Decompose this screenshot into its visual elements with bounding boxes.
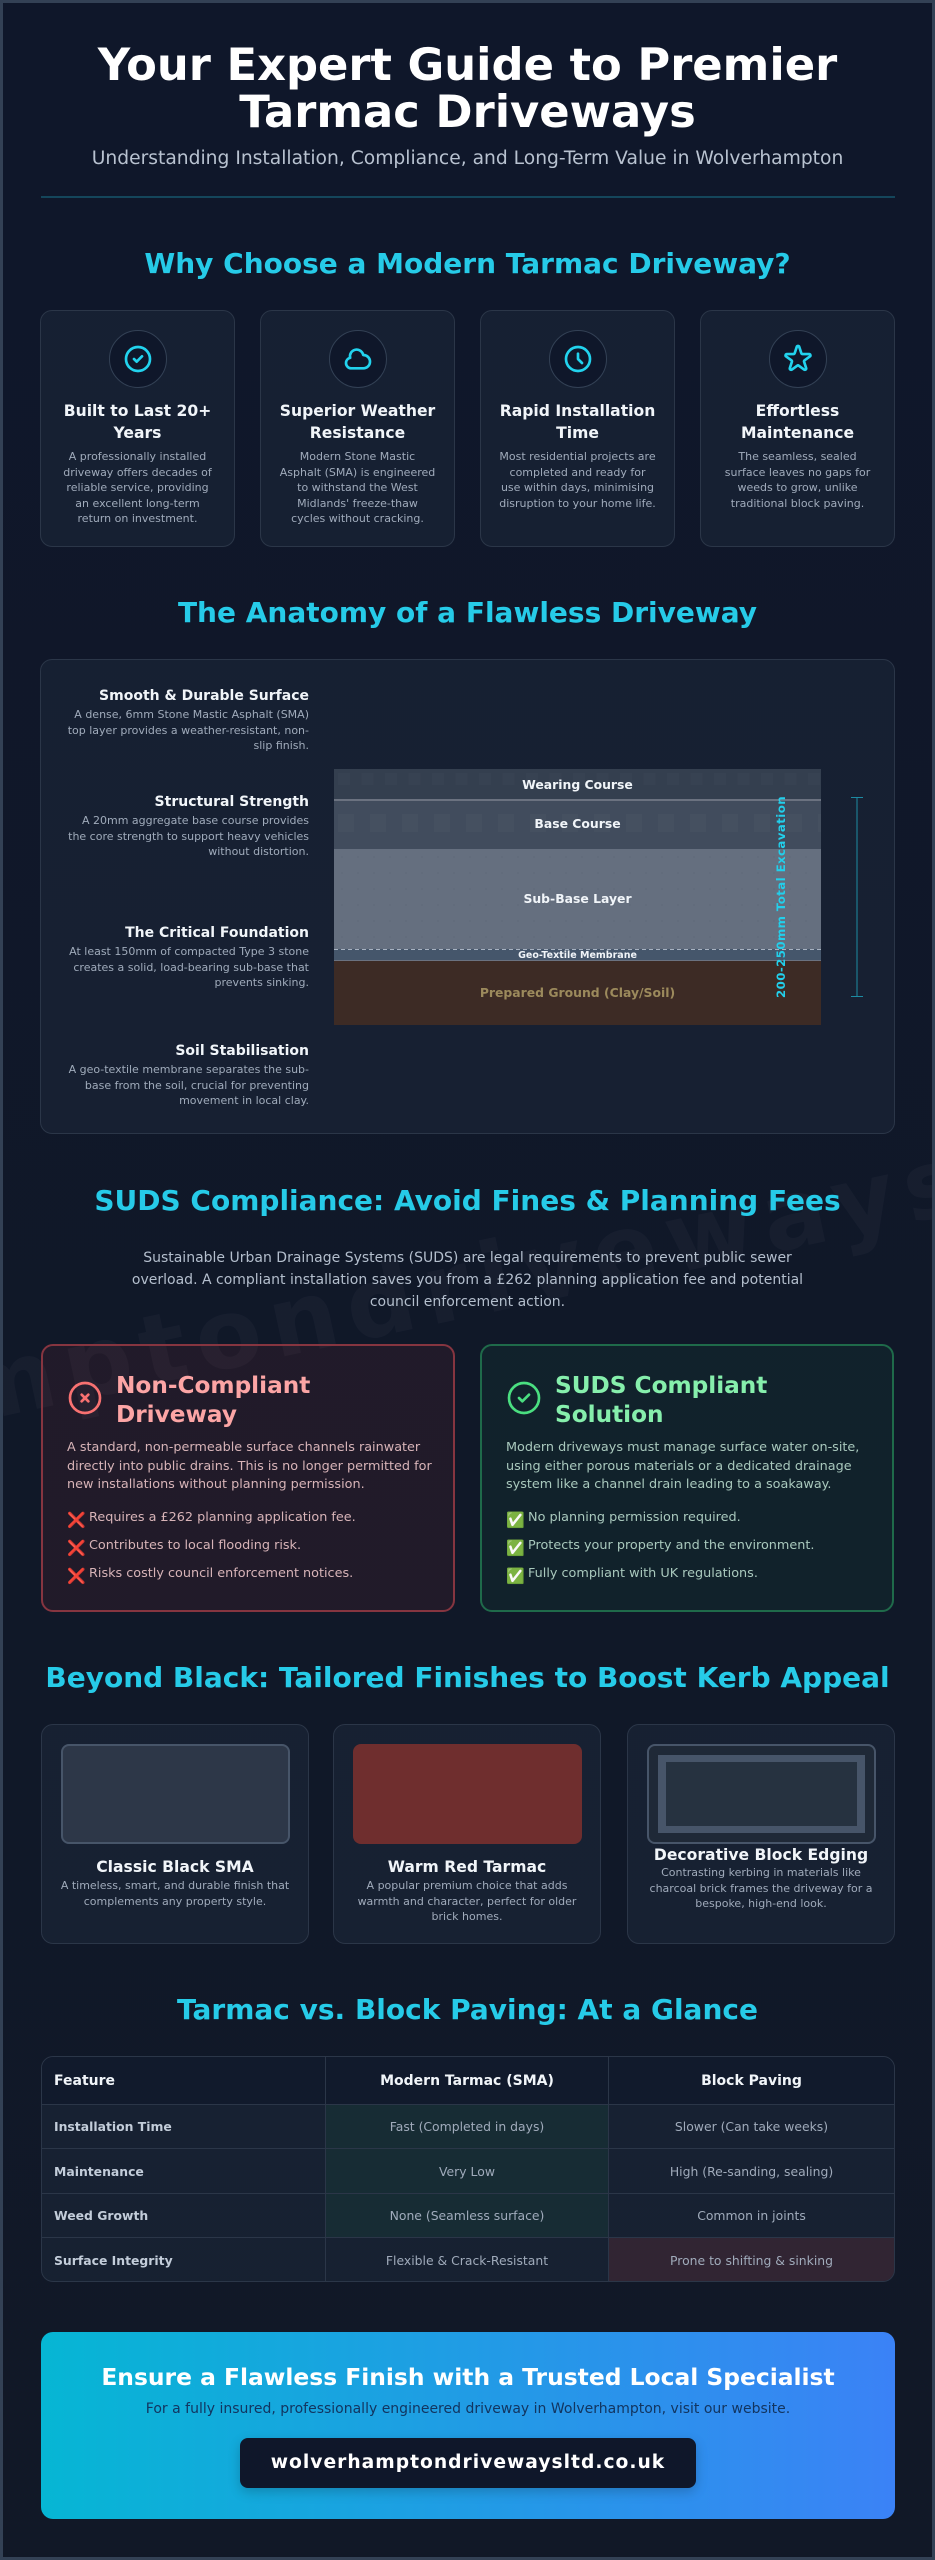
label text — [68, 708, 309, 752]
card text: reliable service, providing — [66, 481, 209, 494]
card text: to withstand the West — [297, 481, 418, 494]
finish text — [358, 1879, 576, 1923]
card text: traditional block paving. — [731, 497, 864, 510]
title — [97, 38, 838, 138]
card title: Resistance — [310, 424, 405, 442]
label text: creates a solid, load-bearing sub-base that — [73, 961, 309, 974]
card title: Time — [556, 424, 599, 442]
card text: completed and ready for — [510, 466, 645, 479]
card text: cycles without cracking. — [291, 512, 424, 525]
swatch: red — [353, 1744, 582, 1844]
finish text: A popular premium choice that adds — [367, 1879, 567, 1892]
finish text: complements any property style. — [84, 1895, 266, 1908]
panel title: Non-Compliant — [116, 1372, 310, 1399]
finish title: Classic Black SMA — [96, 1858, 254, 1876]
finish text: warmth and character, perfect for older — [358, 1895, 576, 1908]
label text: A 20mm aggregate base course provides — [82, 814, 309, 827]
list item: ❌ — [67, 1567, 86, 1585]
icon: star — [769, 330, 827, 388]
edging frame — [658, 1755, 865, 1833]
panel: warm red — [333, 1724, 601, 1944]
panel text: system like a channel drain leading to a soakaway. — [506, 1477, 831, 1492]
finish text: A timeless, smart, and durable finish that — [61, 1879, 289, 1892]
panel: weather resistance — [260, 310, 455, 547]
label text: At least 150mm of compacted Type 3 stone — [69, 945, 309, 958]
list item: Requires a £262 planning application fee. — [89, 1510, 356, 1525]
depth bracket — [851, 797, 863, 997]
text block: surface — [68, 688, 309, 752]
icon: check circle — [508, 1382, 540, 1414]
label text: slip finish. — [254, 739, 309, 752]
card title — [64, 402, 211, 442]
label text: A dense, 6mm Stone Mastic Asphalt (SMA) — [74, 708, 309, 721]
panel text: directly into public drains. This is no longer permitted for — [67, 1459, 432, 1474]
panel: call to action — [41, 2332, 895, 2519]
layer: sub-base — [334, 849, 821, 949]
text block: suds intro: overload. A compliant installation saves you from a £262 planning application fee and potential — [132, 1272, 803, 1288]
panel: rapid installation — [480, 310, 675, 547]
list item: Contributes to local flooding risk. — [89, 1538, 301, 1553]
label text: without distortion. — [208, 845, 309, 858]
card text: Midlands' freeze-thaw — [297, 497, 418, 510]
card text: return on investment. — [78, 512, 197, 525]
label text: prevents sinking. — [215, 976, 309, 989]
title: Tarmac Driveways — [239, 85, 696, 138]
panel: anatomy — [40, 659, 895, 1134]
finish title: Decorative Block Edging — [654, 1846, 868, 1864]
header: block paving: Block Paving — [701, 2072, 802, 2088]
row label: Maintenance — [54, 2164, 144, 2178]
card text: Asphalt (SMA) is engineered — [280, 466, 435, 479]
block value: Slower (Can take weeks) — [675, 2119, 828, 2134]
panel: block edging — [627, 1724, 895, 1944]
cta button — [240, 2438, 696, 2488]
layer: wearing course — [334, 769, 821, 799]
row: installation time — [54, 2119, 828, 2134]
label text: top layer provides a weather-resistant, non- — [68, 724, 309, 737]
card text: The seamless, sealed — [738, 450, 857, 463]
card title — [280, 402, 436, 442]
list — [506, 1510, 814, 1585]
list item: Risks costly council enforcement notices. — [89, 1566, 353, 1581]
text block: soil — [68, 1043, 309, 1107]
label text — [68, 814, 309, 858]
label text: movement in local clay. — [179, 1094, 309, 1107]
panel: non-compliant — [41, 1344, 455, 1612]
cta text: For a fully insured, professionally engineered driveway in Wolverhampton, visit our website. — [146, 2401, 790, 2417]
card text — [499, 450, 656, 510]
swatch: block edging — [647, 1744, 876, 1844]
list item: ✅ — [506, 1539, 525, 1557]
label text: the core strength to support heavy vehicles — [68, 830, 309, 843]
icon: cross circle — [68, 1382, 102, 1414]
label: base course: Base Course — [534, 816, 621, 831]
heading: comparison: Tarmac vs. Block Paving: At a Glance — [177, 1993, 758, 2026]
text block: suds intro — [132, 1250, 803, 1310]
finish title: Warm Red Tarmac — [388, 1858, 546, 1876]
list — [67, 1510, 356, 1585]
panel text — [67, 1440, 432, 1492]
swatch: black — [61, 1744, 290, 1844]
list item: ❌ — [67, 1539, 86, 1557]
list item: ✅ — [506, 1567, 525, 1585]
list item: ✅ — [506, 1511, 525, 1529]
label title: Soil Stabilisation — [175, 1043, 309, 1059]
block value: Prone to shifting & sinking — [670, 2252, 833, 2268]
text block: suds intro: Sustainable Urban Drainage Systems (SUDS) are legal requirements to prevent public sewer — [143, 1250, 792, 1266]
card text: an excellent long-term — [75, 497, 200, 510]
panel title: Solution — [555, 1401, 664, 1428]
text block: foundation — [69, 925, 309, 989]
panel: effortless maintenance — [700, 310, 895, 547]
label title: The Critical Foundation — [125, 925, 309, 941]
finish text — [61, 1879, 289, 1908]
card text: disruption to your home life. — [499, 497, 656, 510]
card text: weeds to grow, unlike — [737, 481, 858, 494]
card title: Built to Last 20+ — [64, 402, 211, 420]
comparison table — [41, 2056, 895, 2282]
card text: use within days, minimising — [501, 481, 654, 494]
card text: Most residential projects are — [499, 450, 656, 463]
tarmac value: Very Low — [439, 2164, 495, 2178]
header: feature: Feature — [54, 2072, 115, 2088]
finish text: brick homes. — [432, 1910, 502, 1923]
card title: Superior Weather — [280, 402, 435, 420]
card text — [63, 450, 212, 525]
label: prepared ground: Prepared Ground (Clay/Soil) — [480, 985, 675, 1000]
card title — [741, 402, 854, 442]
card text: A professionally installed — [69, 450, 206, 463]
cta button: wolverhamptondrivewaysltd.co.uk — [271, 2452, 665, 2473]
card text: Modern Stone Mastic — [300, 450, 415, 463]
panel: compliant — [480, 1344, 894, 1612]
finish text: Contrasting kerbing in materials like — [661, 1866, 861, 1879]
row: surface integrity — [42, 2238, 894, 2282]
row: maintenance — [54, 2164, 833, 2178]
tarmac value: None (Seamless surface) — [390, 2208, 544, 2223]
icon: cloud — [329, 330, 387, 388]
label text: base from the soil, crucial for preventing — [85, 1079, 309, 1092]
layer: prepared ground — [334, 961, 821, 1025]
list item: Protects your property and the environment. — [528, 1538, 814, 1553]
panel text: Modern driveways must manage surface water on-site, — [506, 1440, 859, 1455]
heading: suds: SUDS Compliance: Avoid Fines & Planning Fees — [94, 1184, 841, 1217]
label: wearing course: Wearing Course — [522, 777, 633, 792]
row label: Weed Growth — [54, 2208, 148, 2223]
card text — [725, 450, 870, 510]
tarmac value: Flexible & Crack-Resistant — [386, 2252, 548, 2268]
heading: why choose: Why Choose a Modern Tarmac Driveway? — [144, 247, 791, 280]
text block: strength — [68, 794, 309, 858]
card title: Rapid Installation — [500, 402, 655, 420]
diagram: driveway layers — [334, 769, 821, 1025]
label: sub-base: Sub-Base Layer — [523, 891, 632, 906]
list item: No planning permission required. — [528, 1510, 741, 1525]
panel text: using either porous materials or a dedicated drainage — [506, 1459, 852, 1474]
label: geo-textile: Geo-Textile Membrane — [518, 950, 637, 961]
text block: suds intro: council enforcement action. — [370, 1294, 565, 1310]
block value: Common in joints — [697, 2208, 806, 2223]
icon: clock — [549, 330, 607, 388]
heading: anatomy: The Anatomy of a Flawless Driveway — [178, 596, 757, 629]
panel title: SUDS Compliant — [555, 1372, 767, 1399]
list item: Fully compliant with UK regulations. — [528, 1566, 758, 1581]
layer: geo-textile — [334, 949, 821, 961]
cta heading: Ensure a Flawless Finish with a Trusted Local Specialist — [101, 2363, 835, 2391]
header: tarmac: Modern Tarmac (SMA) — [380, 2072, 554, 2088]
subtitle: Understanding Installation, Compliance, and Long-Term Value in Wolverhampton — [92, 148, 843, 169]
row label: Surface Integrity — [54, 2252, 173, 2268]
header row — [54, 2072, 802, 2088]
card title: Years — [114, 424, 161, 442]
row: weed growth — [42, 2194, 894, 2237]
panel: built to last — [40, 310, 235, 547]
card text — [280, 450, 435, 525]
finish text: bespoke, high-end look. — [695, 1897, 827, 1910]
card text: driveway offers decades of — [63, 466, 212, 479]
label: excavation depth: 200-250mm Total Excavation — [774, 796, 788, 998]
panel: classic black — [41, 1724, 309, 1944]
finish text — [650, 1866, 872, 1910]
card text: surface leaves no gaps for — [725, 466, 870, 479]
finish text: charcoal brick frames the driveway for a — [650, 1882, 872, 1895]
label text — [68, 1063, 309, 1107]
block value: High (Re-sanding, sealing) — [670, 2164, 833, 2178]
card title: Effortless — [756, 402, 839, 420]
tarmac value: Fast (Completed in days) — [390, 2119, 544, 2134]
panel title — [555, 1372, 767, 1428]
label title: Structural Strength — [155, 794, 309, 810]
layer: base course — [334, 801, 821, 849]
panel text: new installations without planning permission. — [67, 1477, 365, 1492]
row label: Installation Time — [54, 2119, 172, 2134]
icon: check circle — [109, 330, 167, 388]
title: Your Expert Guide to Premier — [98, 38, 837, 91]
panel title: Driveway — [116, 1401, 237, 1428]
panel text — [506, 1440, 859, 1492]
panel title — [116, 1372, 310, 1428]
heading: finishes: Beyond Black: Tailored Finishes to Boost Kerb Appeal — [45, 1661, 890, 1694]
label title: Smooth & Durable Surface — [99, 688, 309, 704]
panel text: A standard, non-permeable surface channels rainwater — [67, 1440, 420, 1455]
card title: Maintenance — [741, 424, 854, 442]
label text — [69, 945, 309, 989]
label text: A geo-textile membrane separates the sub- — [69, 1063, 309, 1076]
list item: ❌ — [67, 1511, 86, 1529]
card title — [500, 402, 655, 442]
